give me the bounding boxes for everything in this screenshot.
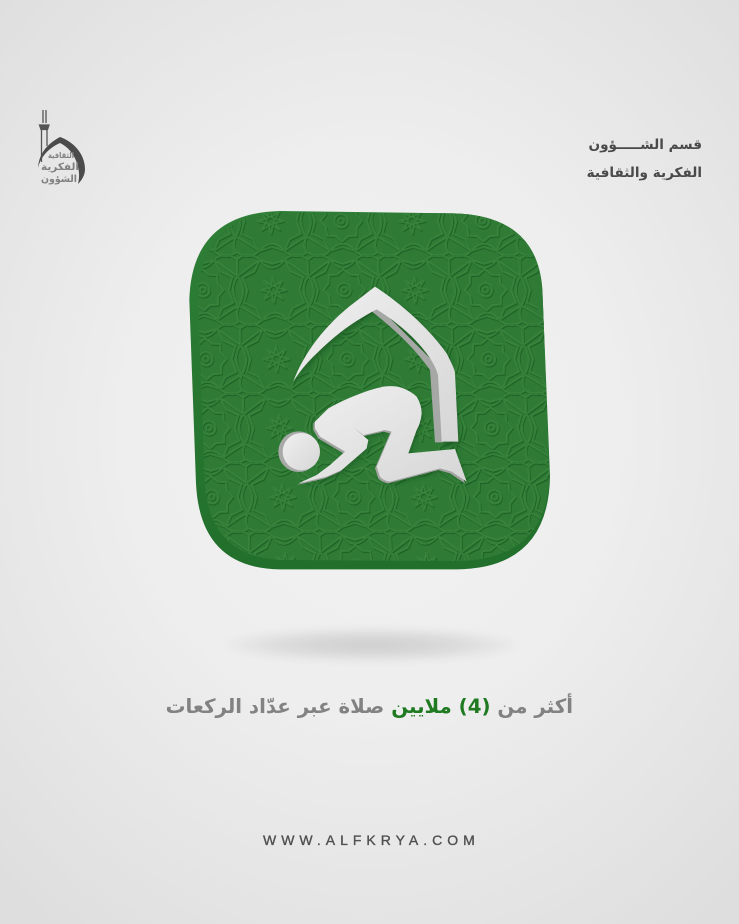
department title: قسم الشـــــؤون: [588, 137, 702, 153]
icon: arch: [293, 287, 461, 447]
geometric Islamic pattern: [198, 212, 549, 561]
logo: mosque dome and minaret with calligraphy: [38, 110, 85, 185]
logo calligraphy: الثقافية: [48, 151, 74, 160]
panel: green 3D app tile: [189, 211, 550, 570]
department title: [587, 137, 702, 181]
logo calligraphy: الفكرية: [41, 162, 79, 173]
icon: head: [278, 431, 320, 472]
logo calligraphy: الشؤون: [41, 174, 77, 185]
department title: الفكرية والثقافية: [587, 165, 702, 181]
icon: person in prostration: [278, 386, 468, 487]
tile side extrusion: [189, 211, 550, 569]
icon: dome crescent: [38, 137, 85, 184]
website url: WWW.ALFKRYA.COM: [263, 832, 480, 848]
icon: minaret: [40, 110, 49, 162]
headline: أكثر من (4) ملايين صلاة عبر عدّاد الركعات: [166, 695, 573, 718]
logo calligraphy: [41, 151, 79, 185]
tile face: [198, 212, 549, 561]
ground shadow: [225, 628, 517, 662]
